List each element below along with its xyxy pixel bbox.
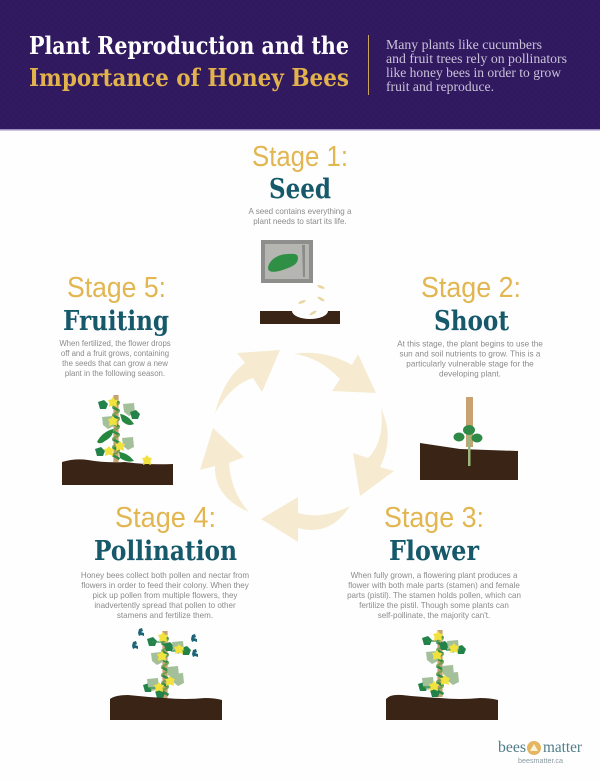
intro text <box>386 38 567 95</box>
panel: stage 4 pollination: Pollination <box>94 536 237 567</box>
panel: stage 3 flower: fertilize the pistil. Though some plants can <box>359 601 509 610</box>
panel: stage 3 flower: flower with both male parts (stamen) and female <box>348 581 520 590</box>
logo: bees matter: bees <box>498 739 526 756</box>
panel: stage 3 flower: When fully grown, a flowering plant produces a <box>351 571 518 580</box>
panel: stage 4 pollination: flowers in order to feed their colony. When they <box>81 581 249 590</box>
icon: soil with seeds <box>260 284 340 324</box>
panel: stage 4 pollination: Honey bees collect both pollen and nectar from <box>81 571 249 580</box>
icon: shoot in soil <box>420 397 518 480</box>
panel: stage 2 shoot: particularly vulnerable stage for the <box>406 360 534 368</box>
panel: stage 4 pollination <box>81 502 249 720</box>
panel: stage 5 fruiting: the seeds that can grow a new <box>62 359 168 368</box>
icon: plant with bees <box>110 628 222 720</box>
panel: stage 2 shoot: Shoot <box>434 306 509 337</box>
cycle arrows <box>200 350 394 542</box>
panel: stage 5 fruiting: Fruiting <box>63 306 169 337</box>
logo: bees matter: matter <box>543 739 583 756</box>
panel: stage 4 pollination: stamens and fertilize them. <box>117 611 213 620</box>
panel: stage 5 fruiting: Stage 5: <box>67 272 166 304</box>
title <box>29 31 349 92</box>
panel: stage 1 seed: Stage 1: <box>252 141 348 173</box>
panel: stage 1 seed: Seed <box>269 174 331 205</box>
header banner <box>0 0 600 130</box>
intro text: Many plants like cucumbers <box>386 38 542 53</box>
panel: stage 1 seed: plant needs to start its life. <box>253 217 347 226</box>
panel: stage 4 pollination: Stage 4: <box>115 502 216 534</box>
panel: stage 4 pollination: pick up pollen from multiple flowers, they <box>93 591 237 600</box>
intro text: like honey bees in order to grow <box>386 66 562 81</box>
panel: stage 2 shoot: At this stage, the plant begins to use the <box>397 340 543 348</box>
panel: stage 1 seed: A seed contains everything a <box>249 207 352 216</box>
panel: stage 4 pollination: inadvertently spread that pollen to other <box>94 601 236 610</box>
intro text: fruit and reproduce. <box>386 80 494 95</box>
panel: stage 3 flower <box>347 502 521 720</box>
logo: bees matter <box>498 739 583 765</box>
title: Importance of Honey Bees <box>29 63 349 92</box>
panel: stage 5 fruiting: When fertilized, the flower drops <box>59 339 171 348</box>
panel: stage 2 shoot: developing plant. <box>439 370 501 378</box>
panel: stage 5 fruiting: plant in the following season. <box>65 369 165 378</box>
panel: stage 2 shoot: Stage 2: <box>421 272 521 304</box>
panel: stage 5 fruiting <box>59 272 173 485</box>
panel: stage 2 shoot: sun and soil nutrients to grow. This is a <box>400 350 541 358</box>
icon: fruiting plant <box>62 395 173 485</box>
panel: stage 1 seed <box>249 141 352 324</box>
panel: stage 3 flower: self-pollinate, the majority can't. <box>378 611 490 620</box>
intro text: and fruit trees rely on pollinators <box>386 52 567 67</box>
icon: seed packet <box>261 240 313 283</box>
panel: stage 3 flower: Flower <box>389 536 480 567</box>
panel: stage 3 flower: Stage 3: <box>384 502 484 534</box>
panel: stage 5 fruiting: off and a fruit grows, containing <box>61 349 169 358</box>
panel: stage 2 shoot <box>397 272 543 480</box>
title: Plant Reproduction and the <box>29 31 349 60</box>
icon: flowering plant <box>386 630 498 720</box>
panel: stage 3 flower: parts (pistil). The stamen holds pollen, which can <box>347 591 521 600</box>
logo: bees matter: beesmatter.ca <box>518 758 563 765</box>
